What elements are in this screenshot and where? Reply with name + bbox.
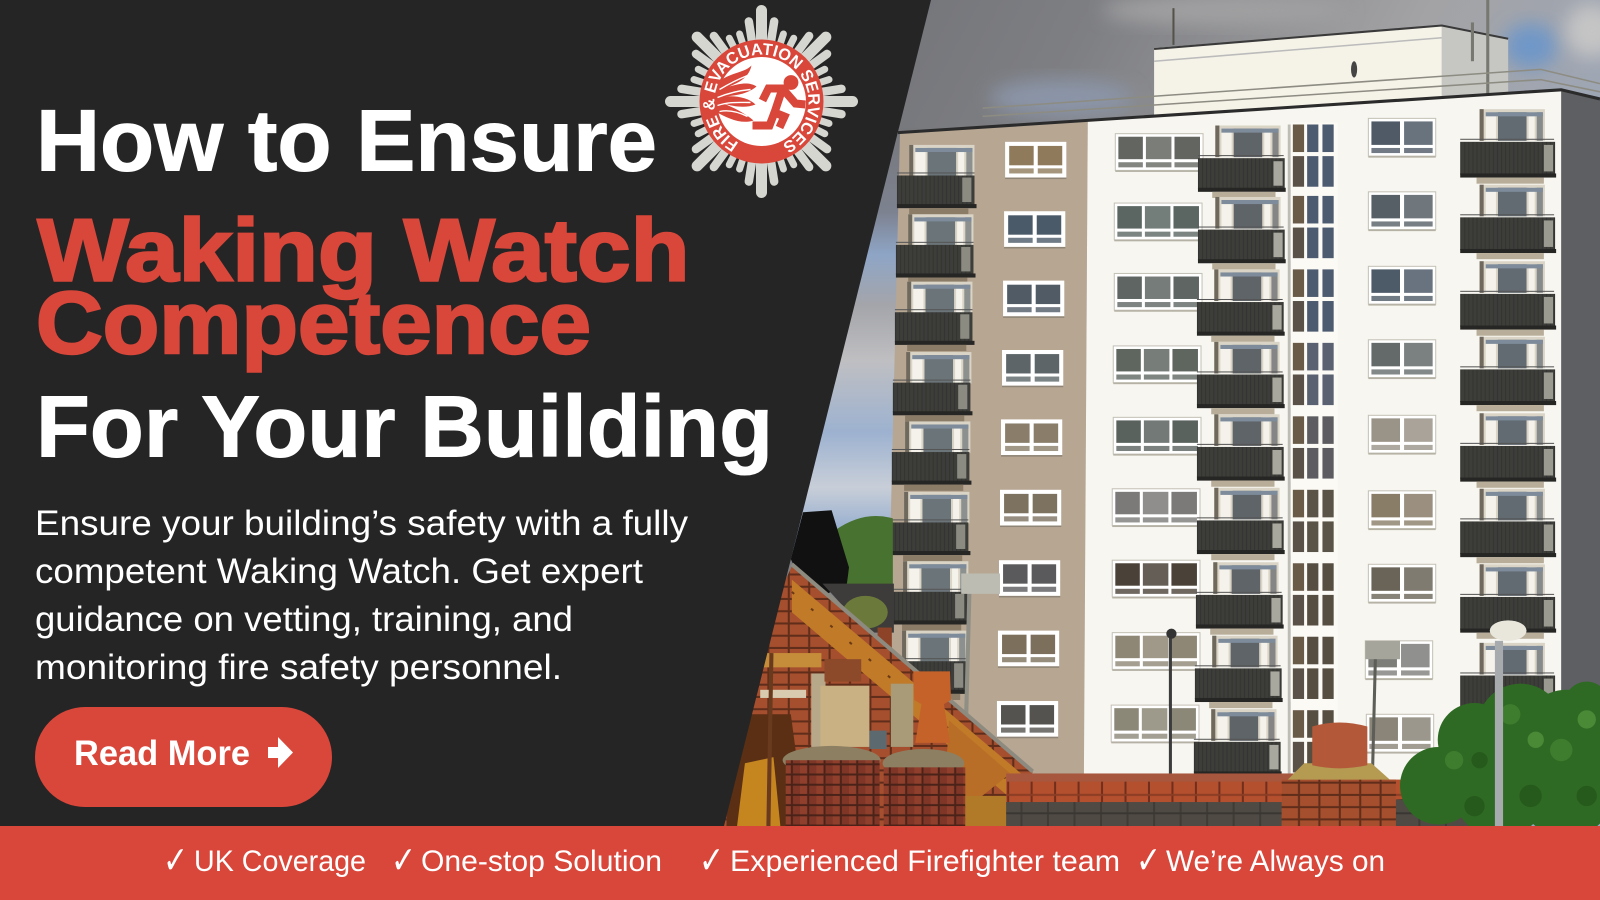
button: read more bbox=[35, 707, 332, 807]
balcony stack, centre bbox=[1194, 126, 1286, 782]
benefit: always on bbox=[1136, 840, 1385, 882]
title bbox=[36, 92, 773, 476]
balcony stack, right bbox=[1460, 109, 1556, 717]
title line 3: Competence bbox=[36, 273, 591, 372]
benefit: one-stop solution: One-stop Solution bbox=[421, 845, 662, 878]
tower walls bbox=[884, 90, 1600, 816]
benefit: one-stop solution bbox=[391, 840, 662, 882]
beige column windows bbox=[997, 142, 1066, 738]
sky bbox=[714, 0, 1600, 829]
benefit: always on: We’re Always on bbox=[1166, 845, 1385, 878]
benefit: experienced firefighter team: Experienced Firefighter team bbox=[730, 845, 1120, 878]
button: read more: Read More bbox=[74, 734, 250, 773]
description text: competent Waking Watch. Get expert bbox=[35, 552, 643, 591]
title line 4: For Your Building bbox=[36, 378, 773, 476]
dark diagonal panel bbox=[0, 0, 931, 826]
running figure bbox=[752, 75, 806, 128]
benefit: UK coverage: ✓ bbox=[163, 840, 188, 882]
rear roofline bbox=[1006, 773, 1520, 829]
benefit: UK coverage: UK Coverage bbox=[194, 845, 366, 878]
badge text: FIRE & EVACUATION SERVICES bbox=[703, 43, 820, 152]
benefit: UK coverage bbox=[163, 840, 366, 882]
logo: fire and evacuation services badge bbox=[665, 5, 858, 198]
tree, right bbox=[1400, 682, 1600, 838]
white column windows, right bbox=[1365, 118, 1436, 754]
description text: monitoring fire safety personnel. bbox=[35, 648, 562, 687]
right chimney bbox=[1282, 722, 1396, 829]
trees behind gable bbox=[791, 510, 894, 668]
street lamp, right bbox=[1490, 620, 1527, 829]
street lamps and poles bbox=[961, 573, 1400, 829]
description text: Ensure your building’s safety with a fully bbox=[35, 504, 689, 543]
balcony stack, left bbox=[889, 145, 977, 700]
stair glazing bbox=[1288, 122, 1338, 788]
title line 2: Waking Watch bbox=[38, 200, 690, 300]
left chimneys bbox=[783, 659, 1010, 829]
benefit: one-stop solution: ✓ bbox=[391, 840, 416, 882]
photo: tower block behind chimneys bbox=[714, 0, 1600, 838]
benefit: always on: ✓ bbox=[1136, 840, 1161, 882]
title line 1: How to Ensure bbox=[36, 92, 657, 190]
white column windows, left bbox=[1111, 134, 1203, 743]
benefits band bbox=[0, 826, 1600, 900]
gable roof bbox=[722, 564, 1033, 829]
description text: guidance on vetting, training, and bbox=[35, 600, 573, 639]
star rays bbox=[663, 3, 860, 200]
flames bbox=[716, 66, 756, 122]
benefit: experienced firefighter team: ✓ bbox=[699, 840, 724, 882]
icon: arrow bbox=[268, 737, 293, 768]
roof plant room bbox=[983, 0, 1600, 120]
description text bbox=[35, 504, 689, 687]
